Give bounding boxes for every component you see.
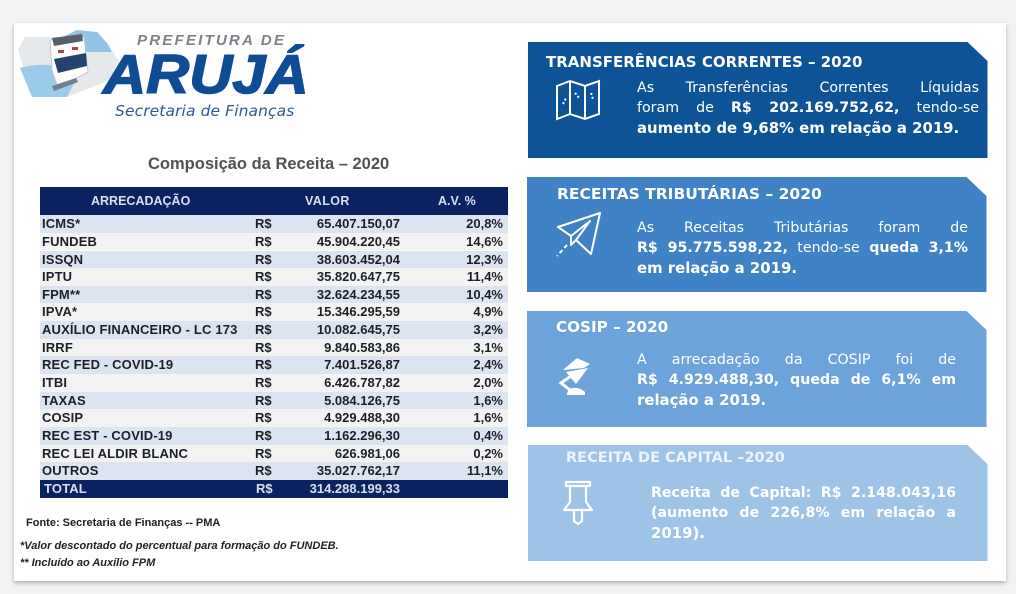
row: [40, 286, 508, 303]
row: 2,0%: [473, 375, 503, 390]
row: R$: [255, 252, 272, 266]
icon: desk lamp: [558, 358, 590, 395]
row: R$: [255, 446, 272, 460]
row: FUNDEB: [42, 234, 97, 249]
row: 0,4%: [473, 428, 503, 443]
row: 1,6%: [473, 393, 503, 408]
row: R$: [255, 463, 272, 478]
row: R$: [255, 234, 272, 249]
row: 10,4%: [466, 287, 503, 302]
row: [40, 233, 508, 250]
body text: Receita de Capital: R$ 2.148.043,16: [651, 484, 956, 500]
row: FPM**: [42, 287, 80, 302]
row: [40, 303, 508, 321]
total row: R$: [256, 480, 273, 496]
table header: A.V. %: [438, 194, 476, 208]
row: R$: [255, 216, 272, 231]
row: [40, 268, 508, 286]
row: ISSQN: [42, 252, 83, 266]
icon: map: [556, 80, 600, 120]
row: R$: [255, 410, 272, 425]
panel: transferências correntes: [528, 42, 988, 158]
footnote: ** Incluído ao Auxílio FPM: [20, 557, 155, 569]
panel: COSIP: [527, 311, 986, 427]
row: IRRF: [42, 340, 73, 355]
row: [40, 427, 508, 445]
row: 10.082.645,75: [317, 322, 400, 337]
table header: VALOR: [305, 194, 350, 208]
row: 1.162.296,30: [324, 428, 400, 443]
body text: relação a 2019.: [637, 390, 766, 408]
body text: R$ 95.775.598,22, tendo-se queda 3,1%: [637, 240, 968, 256]
row: 11,1%: [467, 463, 503, 478]
row: ICMS*: [42, 216, 80, 231]
row: 2,4%: [473, 357, 503, 372]
row: [40, 356, 508, 374]
row: REC FED - COVID-19: [42, 357, 173, 372]
row: [40, 392, 508, 409]
row: 9.840.583,86: [324, 340, 400, 355]
body text: [637, 352, 956, 408]
row: TAXAS: [42, 393, 86, 408]
total row: TOTAL: [44, 480, 87, 496]
row: 65.407.150,07: [317, 216, 400, 231]
row: 4,9%: [473, 304, 503, 319]
row: 6.426.787,82: [324, 375, 400, 390]
row: 7.401.526,87: [324, 357, 400, 372]
row: 38.603.452,04: [317, 252, 400, 266]
row: IPTU: [42, 269, 72, 284]
row: 11,4%: [467, 269, 503, 284]
body text: [637, 80, 979, 137]
row: REC EST - COVID-19: [42, 428, 173, 443]
row: 20,8%: [466, 216, 503, 231]
heading: TRANSFERÊNCIAS CORRENTES – 2020: [546, 52, 862, 70]
heading: RECEITA DE CAPITAL –2020: [566, 450, 785, 466]
row: REC LEI ALDIR BLANC: [42, 446, 188, 460]
row: 4.929.488,30: [324, 410, 400, 425]
row: [40, 215, 508, 233]
row: R$: [255, 269, 272, 284]
row: 626.981,06: [335, 446, 400, 460]
logo: Prefeitura de Arujá: [18, 30, 309, 120]
row: [40, 250, 508, 268]
body text: R$ 4.929.488,30, queda de 6,1% em: [637, 372, 956, 388]
row: AUXÍLIO FINANCEIRO - LC 173: [42, 322, 237, 337]
logo text: secretaria de finanças: Secretaria de Finanças: [115, 102, 294, 120]
row: R$: [255, 304, 272, 319]
row: 32.624.234,55: [317, 287, 400, 302]
row: OUTROS: [42, 463, 99, 478]
heading: COSIP – 2020: [556, 318, 668, 336]
panel: receitas tributárias: [527, 177, 986, 292]
row: R$: [255, 357, 272, 372]
row: R$: [255, 340, 272, 355]
icon: push pin: [562, 480, 594, 525]
panel background: [528, 42, 988, 158]
row: [40, 409, 508, 427]
icon: paper plane: [556, 212, 601, 257]
row: R$: [255, 393, 272, 408]
logo text: Arujá: ARUJÁ: [103, 42, 309, 104]
source note: Fonte: Secretaria de Finanças -- PMA: [26, 517, 220, 529]
row: 15.346.295,59: [317, 304, 400, 319]
body text: 2019).: [651, 524, 705, 542]
row: R$: [255, 428, 272, 443]
row: IPVA*: [42, 304, 77, 319]
table header: ARRECADAÇÃO: [91, 194, 190, 208]
panel: receita de capital: [528, 445, 988, 561]
body text: em relação a 2019.: [637, 258, 797, 276]
body text: A arrecadação da COSIP foi de: [637, 352, 956, 368]
row: 1,6%: [473, 410, 503, 425]
table header: [40, 187, 508, 215]
row: R$: [255, 322, 272, 337]
body text: foram de R$ 202.169.752,62, tendo-se: [637, 100, 979, 116]
logo text: prefeitura de: PREFEITURA DE: [137, 32, 286, 49]
row: 45.904.220,45: [317, 234, 400, 249]
body text: [637, 220, 968, 276]
panel background: [527, 311, 986, 427]
row: [40, 462, 508, 480]
panel background: [528, 445, 988, 561]
body text: (aumento de 226,8% em relação a: [651, 504, 956, 520]
body text: As Receitas Tributárias foram de: [637, 220, 968, 236]
row: 0,2%: [473, 446, 503, 460]
row: 14,6%: [466, 234, 503, 249]
row: 12,3%: [466, 252, 503, 266]
row: [40, 444, 508, 462]
row: COSIP: [42, 410, 83, 425]
row: [40, 339, 508, 356]
body text: As Transferências Correntes Líquidas: [637, 80, 979, 96]
icon: flag with coat of arms: [18, 30, 120, 97]
row: 3,2%: [473, 322, 503, 337]
row: 3,1%: [473, 340, 503, 355]
total row: [40, 480, 508, 498]
footnote: *Valor descontado do percentual para formação do FUNDEB.: [20, 540, 339, 552]
body text: aumento de 9,68% em relação a 2019.: [637, 119, 959, 137]
row: 5.084.126,75: [324, 393, 400, 408]
row: R$: [255, 287, 272, 302]
row: 35.820.647,75: [317, 269, 400, 284]
row: 35.027.762,17: [317, 463, 400, 478]
table: revenue composition: [40, 187, 508, 498]
row: [40, 374, 508, 392]
total row: 314.288.199,33: [310, 480, 400, 496]
table title: Composição da Receita – 2020: [148, 155, 389, 173]
row: ITBI: [42, 375, 67, 390]
row: [40, 321, 508, 339]
heading: RECEITAS TRIBUTÁRIAS – 2020: [557, 185, 822, 203]
body text: [651, 484, 956, 542]
panel background: [527, 177, 986, 292]
row: R$: [255, 375, 272, 390]
